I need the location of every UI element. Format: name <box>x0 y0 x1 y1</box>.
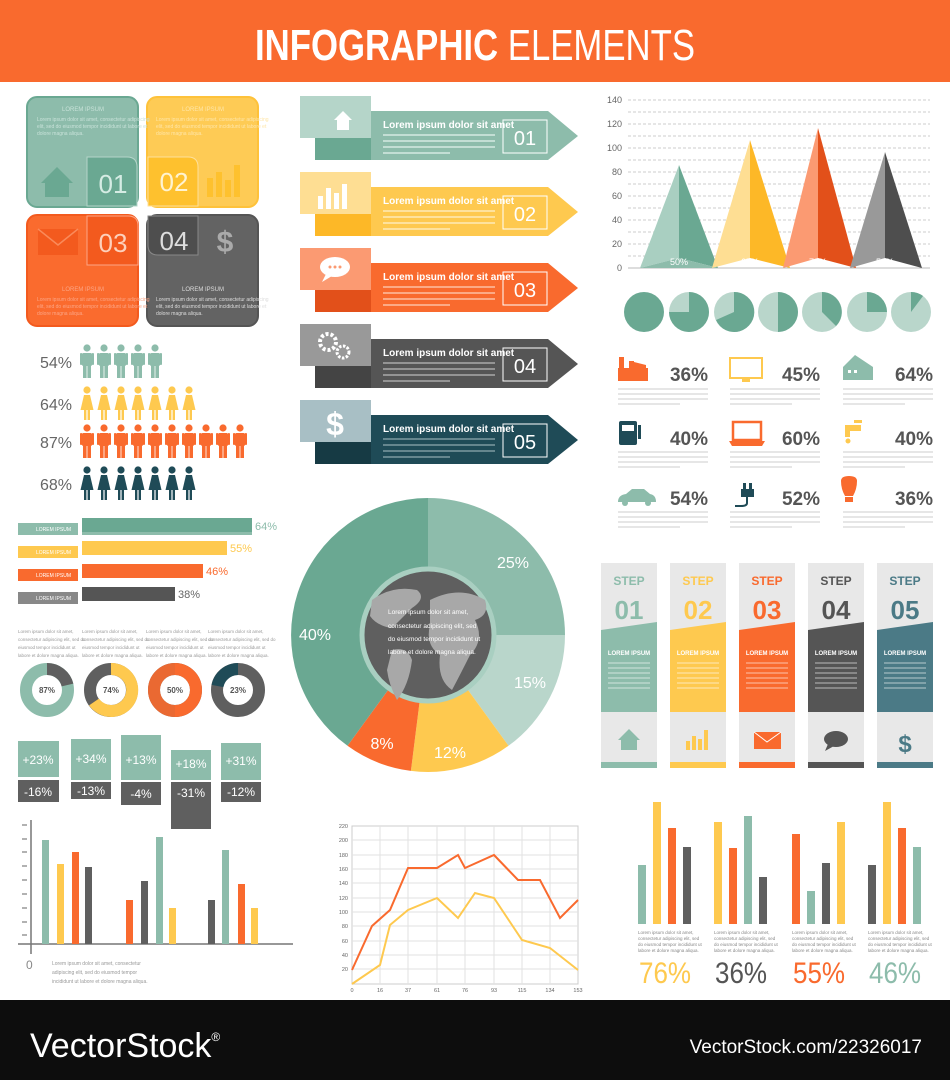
panel: horizontal bars: 46% <box>206 566 228 578</box>
step 01: LOREM IPSUM <box>608 651 650 657</box>
pyramid chart: 50% <box>670 257 688 267</box>
panel: quad boxes: LOREM IPSUM <box>62 107 104 113</box>
panel: quad boxes: LOREM IPSUM <box>182 107 224 113</box>
panel: horizontal bars: LOREM IPSUM <box>36 596 71 602</box>
panel: plus/minus boxes: +23% <box>22 753 54 767</box>
ribbon 02: Lorem ipsum dolor sit amet <box>383 196 515 207</box>
step 01: STEP <box>613 574 645 588</box>
bar groups: bottom right: Lorem ipsum dolor sit amet, <box>638 930 694 935</box>
panel: quad boxes: dolore magna aliqua. <box>156 311 203 317</box>
bar groups: bottom right: 46% <box>869 957 921 990</box>
text block: four columns: labore et dolore magna aliqua. <box>18 653 79 658</box>
ribbon 02: 02 <box>514 204 536 226</box>
ribbon 01: 01 <box>514 128 536 150</box>
line chart: 180 <box>339 853 348 859</box>
panel: quad boxes: dolore magna aliqua. <box>37 311 84 317</box>
panel: quad boxes: elit, sed do eiusmod tempor incididunt ut labore et <box>156 304 267 310</box>
pie chart with globe: Lorem ipsum dolor sit amet, <box>388 609 468 616</box>
line chart: 100 <box>339 910 348 916</box>
bar groups: bottom right: labore et dolore magna aliqua. <box>714 948 775 953</box>
panel: icon statistics grid: 54% <box>670 489 708 510</box>
step 03: 03 <box>753 595 781 625</box>
line chart: 140 <box>339 881 348 887</box>
panel: quad boxes: dolore magna aliqua. <box>156 131 203 137</box>
panel: plus/minus boxes: -31% <box>177 786 205 800</box>
bar groups: bottom right: consectetur adipiscing elit, sed <box>714 936 776 941</box>
footer brand: ® <box>211 1030 220 1044</box>
ribbon 03: 03 <box>514 280 536 302</box>
pie chart with globe: 40% <box>299 627 331 644</box>
line chart: 61 <box>434 988 440 994</box>
step 01 <box>601 563 657 768</box>
panel: people percentages <box>40 344 247 500</box>
panel: icon statistics grid: 60% <box>782 429 820 450</box>
pie chart with globe: consectetur adipiscing elit, sed <box>388 623 477 630</box>
line chart: 20 <box>342 967 348 973</box>
panel: plus/minus boxes: -12% <box>227 785 255 799</box>
bar groups: bottom right: do eiusmod tempor incididunt ut <box>792 942 857 947</box>
ribbon 02 <box>300 172 578 236</box>
ribbon 04: Lorem ipsum dolor sit amet <box>383 348 515 359</box>
icon: bulb <box>841 476 857 502</box>
panel: plus/minus boxes: -16% <box>24 785 52 799</box>
text block: four columns <box>18 629 276 658</box>
line chart: 220 <box>339 824 348 830</box>
bar chart: bottom left: incididunt ut labore et dolore magna aliqua. <box>52 979 148 985</box>
pyramid chart <box>607 95 930 273</box>
line chart: 134 <box>545 988 555 994</box>
panel: quad boxes: LOREM IPSUM <box>62 287 104 293</box>
pie chart with globe: 12% <box>434 745 466 762</box>
line chart: 80 <box>342 924 348 930</box>
text block: four columns: Lorem ipsum dolor sit amet, <box>208 629 264 634</box>
panel: plus/minus boxes: +18% <box>175 757 207 771</box>
footer url: VectorStock.com/22326017 <box>690 1037 922 1058</box>
donut charts row: 87% <box>39 686 55 695</box>
panel: quad boxes: Lorem ipsum dolor sit amet, consectetur adipiscing <box>37 297 150 303</box>
panel: numbered ribbons <box>300 96 578 464</box>
bar groups: bottom right: do eiusmod tempor incididunt ut <box>638 942 703 947</box>
pyramid chart: 80 <box>612 167 622 177</box>
pyramid chart: 40 <box>612 215 622 225</box>
ribbon 05 <box>300 400 578 464</box>
step 04: STEP <box>820 574 852 588</box>
panel: quad boxes: 01 <box>99 169 127 199</box>
panel: quad boxes: Lorem ipsum dolor sit amet, consectetur adipiscing <box>156 297 269 303</box>
text block: four columns: labore et dolore magna aliqua. <box>208 653 269 658</box>
pie chart with globe <box>291 498 565 772</box>
panel: people percentages: 64% <box>40 397 72 414</box>
icon: factory <box>618 357 648 381</box>
donut charts row: 23% <box>230 686 246 695</box>
line chart: 120 <box>339 896 348 902</box>
bar groups: bottom right: consectetur adipiscing elit, sed <box>868 936 930 941</box>
line chart: 37 <box>405 988 411 994</box>
bar chart: bottom left: adipiscing elit, sed do eiusmod tempor <box>52 970 137 976</box>
panel: quad boxes: 03 <box>99 228 127 258</box>
panel: icon statistics grid: 64% <box>895 365 933 386</box>
ribbon 03 <box>300 248 578 312</box>
text block: four columns: eiusmod tempor incididunt ut <box>18 645 76 650</box>
pyramid chart: 65% <box>741 257 759 267</box>
pie chart with globe: do eiusmod tempor incididunt ut <box>388 636 480 643</box>
pie chart with globe: 8% <box>370 736 394 753</box>
footer brand: VectorStock <box>30 1027 211 1065</box>
panel: quad boxes: elit, sed do eiusmod tempor incididunt ut labore et <box>156 124 267 130</box>
panel: icon statistics grid <box>618 355 933 527</box>
panel: quad boxes: Lorem ipsum dolor sit amet, consectetur adipiscing <box>156 117 269 123</box>
panel: quad boxes: dolore magna aliqua. <box>37 131 84 137</box>
panel: horizontal bars: LOREM IPSUM <box>36 550 71 556</box>
line chart: 60 <box>342 939 348 945</box>
pyramid chart: 0 <box>617 263 622 273</box>
pyramid chart: 56% <box>876 257 894 267</box>
bar groups: bottom right: 36% <box>715 957 767 990</box>
icon: house <box>843 355 873 380</box>
panel: icon statistics grid: 45% <box>782 365 820 386</box>
text block: four columns: labore et dolore magna aliqua. <box>146 653 207 658</box>
panel: horizontal bars: 55% <box>230 543 252 555</box>
panel: horizontal bars: 38% <box>178 589 200 601</box>
step 03 <box>739 563 795 768</box>
bar groups: bottom right: labore et dolore magna aliqua. <box>792 948 853 953</box>
pie chart with globe: 25% <box>497 555 529 572</box>
text block: four columns: Lorem ipsum dolor sit amet, <box>146 629 202 634</box>
title: INFOGRAPHIC ELEMENTS <box>255 21 695 70</box>
step 04: 04 <box>822 595 851 625</box>
panel: icon statistics grid: 40% <box>895 429 933 450</box>
panel: horizontal bars <box>18 518 277 604</box>
step 02: LOREM IPSUM <box>677 651 719 657</box>
icon: laptop <box>729 422 765 446</box>
line chart: 40 <box>342 953 348 959</box>
panel: plus/minus boxes: +31% <box>225 754 257 768</box>
panel: plus/minus boxes <box>18 735 261 829</box>
bar groups: bottom right: consectetur adipiscing elit, sed <box>792 936 854 941</box>
ribbon 03: Lorem ipsum dolor sit amet <box>383 272 515 283</box>
bar groups: bottom right: Lorem ipsum dolor sit amet, <box>868 930 924 935</box>
panel: icon statistics grid: 36% <box>670 365 708 386</box>
step 03: STEP <box>751 574 783 588</box>
line chart: 153 <box>573 988 583 994</box>
panel: horizontal bars: LOREM IPSUM <box>36 527 71 533</box>
step 03: LOREM IPSUM <box>746 651 788 657</box>
icon: fuel pump <box>619 421 641 445</box>
step 05: STEP <box>889 574 921 588</box>
line chart: 115 <box>518 988 526 994</box>
panel: horizontal bars: 64% <box>255 521 277 533</box>
icon: plug <box>735 483 754 506</box>
bar groups: bottom right: labore et dolore magna aliqua. <box>638 948 699 953</box>
icon: tap <box>845 420 862 444</box>
panel: quad boxes: $ <box>217 226 234 259</box>
step 02 <box>670 563 726 768</box>
ribbon 05: $ <box>326 406 344 442</box>
step 02: STEP <box>682 574 714 588</box>
panel: plus/minus boxes: -4% <box>130 787 152 801</box>
line chart: 0 <box>350 988 354 994</box>
bar groups: bottom right: do eiusmod tempor incididunt ut <box>868 942 933 947</box>
bar chart: bottom left: 0 <box>26 958 33 972</box>
text block: four columns: Lorem ipsum dolor sit amet, <box>82 629 138 634</box>
donut charts row <box>26 669 259 711</box>
bar groups: bottom right: Lorem ipsum dolor sit amet, <box>792 930 848 935</box>
ribbon 04 <box>300 324 578 388</box>
step 05 <box>877 563 933 768</box>
step 02: 02 <box>684 595 712 625</box>
bar chart: bottom left: Lorem ipsum dolor sit amet, consectetur <box>52 961 141 967</box>
bar groups: bottom right: consectetur adipiscing elit, sed <box>638 936 700 941</box>
bar groups: bottom right: 76% <box>639 957 691 990</box>
ribbon 01 <box>300 96 578 160</box>
text block: four columns: consectetur adipiscing elit, sed do <box>146 637 214 642</box>
panel: plus/minus boxes: +34% <box>75 752 107 766</box>
pyramid chart: 140 <box>607 95 622 105</box>
pyramid chart: 72% <box>809 257 827 267</box>
step 01: 01 <box>615 595 643 625</box>
small pie circles row <box>624 292 931 332</box>
donut charts row: 74% <box>103 686 119 695</box>
panel: icon statistics grid: 36% <box>895 489 933 510</box>
text block: four columns: consectetur adipiscing elit, sed do <box>82 637 150 642</box>
ribbon 01: Lorem ipsum dolor sit amet <box>383 120 515 131</box>
line chart: 93 <box>491 988 497 994</box>
panel: people percentages: 68% <box>40 477 72 494</box>
donut charts row: 50% <box>167 686 183 695</box>
text block: four columns: consectetur adipiscing elit, sed do <box>208 637 276 642</box>
line chart <box>339 824 583 994</box>
step 04: LOREM IPSUM <box>815 651 857 657</box>
pie chart with globe: labore et dolore magna aliqua. <box>388 649 476 656</box>
pyramid chart: 20 <box>612 239 622 249</box>
line chart: 200 <box>339 838 348 844</box>
footer bar <box>0 1000 950 1080</box>
ribbon 05: Lorem ipsum dolor sit amet <box>383 424 515 435</box>
bar groups: bottom right <box>638 802 933 990</box>
ribbon 05: 05 <box>514 432 536 454</box>
panel: icon statistics grid: 52% <box>782 489 820 510</box>
panel: quad boxes: LOREM IPSUM <box>182 287 224 293</box>
panel: plus/minus boxes: -13% <box>77 784 105 798</box>
bar groups: bottom right: do eiusmod tempor incididunt ut <box>714 942 779 947</box>
panel: quad boxes <box>27 97 269 326</box>
icon: car <box>618 489 656 506</box>
panel: people percentages: 87% <box>40 435 72 452</box>
pyramid chart: 120 <box>607 119 622 129</box>
icon: monitor <box>730 358 762 382</box>
text block: four columns: eiusmod tempor incididunt ut <box>146 645 204 650</box>
panel: people percentages: 54% <box>40 355 72 372</box>
step 05: $ <box>898 731 912 758</box>
bar chart: bottom left <box>18 820 293 985</box>
panel: quad boxes: elit, sed do eiusmod tempor incididunt ut labore et <box>37 304 148 310</box>
pyramid chart: 100 <box>607 143 622 153</box>
bar groups: bottom right: Lorem ipsum dolor sit amet, <box>714 930 770 935</box>
text block: four columns: labore et dolore magna aliqua. <box>82 653 143 658</box>
line chart: 16 <box>377 988 383 994</box>
text block: four columns: eiusmod tempor incididunt ut <box>82 645 140 650</box>
panel: icon statistics grid: 40% <box>670 429 708 450</box>
text block: four columns: consectetur adipiscing elit, sed do <box>18 637 86 642</box>
step 05: 05 <box>891 595 919 625</box>
bar groups: bottom right: labore et dolore magna aliqua. <box>868 948 929 953</box>
panel: horizontal bars: LOREM IPSUM <box>36 573 71 579</box>
text block: four columns: eiusmod tempor incididunt ut <box>208 645 266 650</box>
panel: plus/minus boxes: +13% <box>125 753 157 767</box>
panel: quad boxes: 04 <box>160 226 188 256</box>
panel: quad boxes: Lorem ipsum dolor sit amet, consectetur adipiscing <box>37 117 150 123</box>
pie chart with globe: 15% <box>514 675 546 692</box>
step 05: LOREM IPSUM <box>884 651 926 657</box>
line chart: 76 <box>462 988 468 994</box>
panel: quad boxes: elit, sed do eiusmod tempor incididunt ut labore et <box>37 124 148 130</box>
header bar <box>0 0 950 82</box>
step 04 <box>808 563 864 768</box>
pyramid chart: 60 <box>612 191 622 201</box>
ribbon 04: 04 <box>514 356 536 378</box>
text block: four columns: Lorem ipsum dolor sit amet, <box>18 629 74 634</box>
bar groups: bottom right: 55% <box>793 957 845 990</box>
panel: quad boxes: 02 <box>160 167 188 197</box>
panel: step cards <box>601 563 933 768</box>
line chart: 160 <box>339 867 348 873</box>
